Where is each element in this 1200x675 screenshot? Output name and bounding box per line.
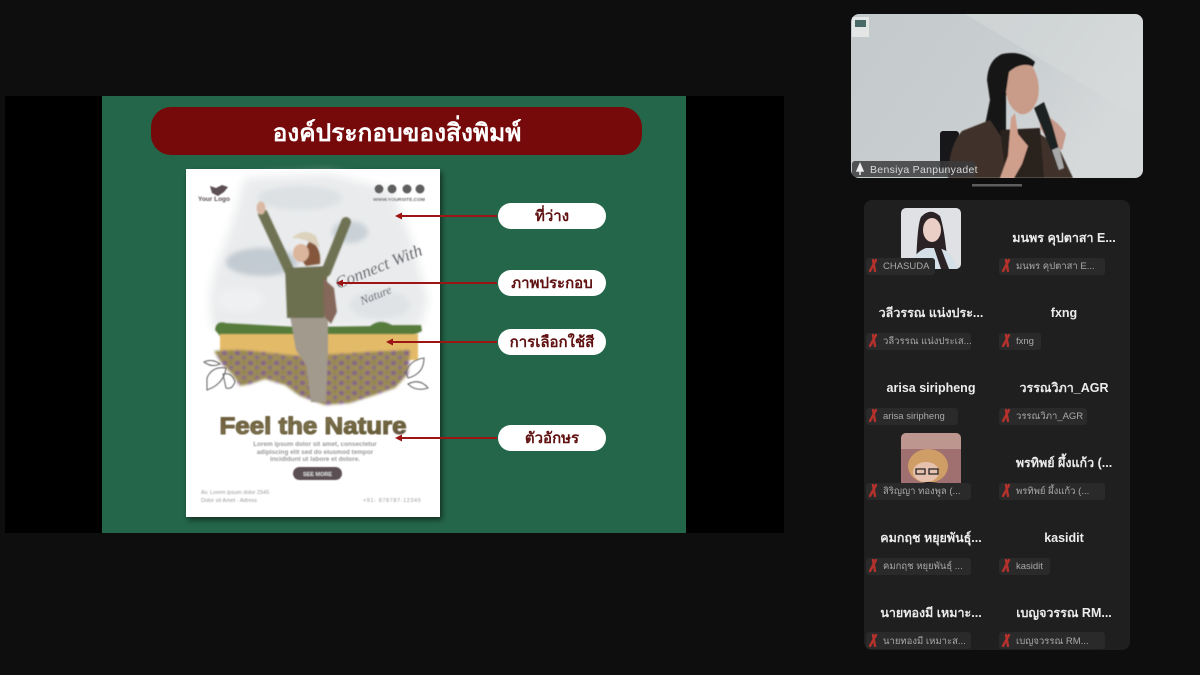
participant name headings: วรรณวิภา_AGR: [1019, 381, 1109, 395]
avatar: Sirinya: [901, 433, 961, 483]
poster body text: [253, 441, 377, 463]
participant tags: วรรณวิภา_AGR: [1016, 411, 1083, 422]
participant name headings: [879, 231, 1116, 620]
participant name headings: วลีวรรณ แน่งประ...: [879, 306, 983, 320]
poster logo: Your Logo: [198, 196, 230, 203]
poster button: SEE MORE: [303, 472, 332, 478]
slide letterbox: [5, 96, 784, 533]
participant tags: มนพร คุปตาสา E...: [1016, 261, 1095, 272]
participant name headings: เบญจวรรณ RM...: [1016, 606, 1112, 620]
title pill: [151, 107, 642, 155]
name tag: [852, 161, 978, 177]
poster footer: [201, 490, 421, 504]
panel: speaker video: [851, 14, 1143, 178]
participant tags: วลีวรรณ แน่งประเส...: [883, 335, 972, 347]
participant name headings: fxng: [1051, 306, 1077, 320]
speaker figure: [948, 53, 1073, 178]
poster headline: Feel the Nature: [220, 413, 406, 440]
participant tags: fxng: [1016, 336, 1034, 347]
icon: wall thermostat: [852, 17, 869, 37]
participant tags: [866, 258, 1105, 649]
panel: participants: [864, 200, 1130, 650]
label: white space: [498, 203, 606, 229]
poster: [186, 169, 440, 517]
poster script text: Connect With: [332, 241, 425, 293]
poster social icons: [373, 184, 425, 203]
poster footer: Dolor sit Amet - Adress: [201, 498, 257, 504]
participant tags: พรทิพย์ ผึ้งแก้ว (...: [1016, 484, 1089, 497]
poster button: [293, 467, 342, 480]
participant tags: คมกฤช หยุยพันธุ์ ...: [883, 560, 963, 572]
arrow: colour: [386, 338, 497, 346]
poster footer: Av. Lorem ipsum dolor 2545: [201, 490, 269, 496]
chair: [940, 131, 959, 169]
poster sky photo: [210, 174, 428, 328]
label: white space: ที่ว่าง: [535, 205, 569, 225]
participant tags: CHASUDA: [883, 261, 930, 272]
poster field and lavender photo: [204, 322, 428, 405]
participant name headings: kasidit: [1044, 531, 1085, 545]
poster footer: +91- 878787-12345: [363, 498, 421, 504]
participant name headings: คมกฤช หยุยพันธุ์...: [880, 530, 982, 546]
avatar: CHASUDA: [901, 208, 961, 269]
participant name headings: นายทองมี เหมาะ...: [880, 606, 982, 620]
label: colour choice: การเลือกใช้สี: [510, 333, 595, 351]
label: illustration: ภาพประกอบ: [511, 275, 593, 292]
drag handle bar: [972, 184, 1022, 186]
participant tags: เบญจวรรณ RM...: [1016, 636, 1089, 647]
title pill: องค์ประกอบของสิ่งพิมพ์: [273, 115, 521, 147]
poster social icons: WWW.YOURSITE.COM: [373, 197, 425, 203]
arrow: white space: [395, 212, 497, 220]
poster body text: incididunt ut labore et dolore.: [270, 456, 360, 463]
poster logo: [198, 185, 230, 203]
panel: green slide: [102, 96, 686, 533]
label: illustration: [498, 270, 606, 296]
label: colour choice: [498, 329, 606, 355]
participant name headings: arisa siripheng: [887, 381, 975, 395]
participant name headings: มนพร คุปตาสา E...: [1012, 231, 1116, 246]
participant tags: arisa siripheng: [883, 411, 945, 422]
participant tags: สิริญญา ทองพูล (...: [883, 486, 960, 497]
arrow: illustration: [336, 280, 497, 286]
participant tags: kasidit: [1016, 561, 1043, 572]
participant name headings: พรทิพย์ ผึ้งแก้ว (...: [1016, 453, 1112, 470]
arrow: typography: [395, 434, 497, 442]
poster body text: adipiscing elit sed do eiusmod tempor: [257, 449, 374, 456]
participant tags: นายทองมี เหมาะส...: [883, 635, 966, 647]
name tag: Bensiya Panpunyadet: [870, 164, 978, 176]
poster person: [256, 202, 346, 402]
poster body text: Lorem ipsum dolor sit amet, consectetur: [253, 441, 377, 448]
label: typography: ตัวอักษร: [525, 430, 580, 447]
label: typography: [498, 425, 606, 451]
poster script text: Nature: [357, 282, 394, 308]
icons: muted microphones: [870, 260, 1009, 646]
